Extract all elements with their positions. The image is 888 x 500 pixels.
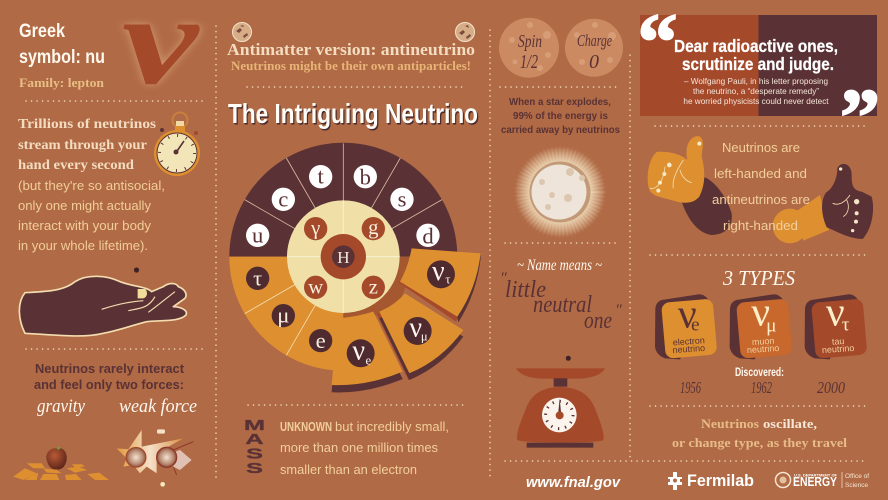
quote text: scrutinize and judge. — [682, 54, 834, 74]
quark tokens: s — [398, 187, 406, 212]
icon: left-hand thumbs up — [648, 136, 732, 235]
heading: Greek symbol: Greek — [19, 20, 65, 42]
quark tokens: b — [360, 165, 371, 190]
neutrino wedge: electron: e — [366, 354, 372, 368]
card: tau neutrino: ν — [826, 289, 845, 335]
panel: antimatter — [227, 22, 475, 73]
heading: antimatter version: Antimatter version: antineutrino — [227, 40, 475, 59]
lepton half ring — [229, 257, 343, 371]
panel: oscillation: or change type, as they travel — [672, 435, 847, 450]
boson tokens: z — [369, 276, 378, 298]
panel: symbol and family — [19, 0, 200, 111]
heading: Greek symbol — [19, 20, 105, 68]
years discovered: 1956 — [680, 378, 701, 397]
panel: oscillation: Neutrinos — [701, 416, 759, 431]
quote text — [674, 36, 838, 74]
panel: spin: 1/2 — [520, 51, 538, 73]
text: handedness — [712, 141, 810, 233]
card: muon neutrino: muon — [752, 336, 775, 347]
boson tokens: γ — [310, 218, 320, 240]
text: antisocial note: interact with your body — [18, 219, 152, 233]
panel: Pauli quote — [638, 0, 880, 162]
text: star explodes: 99% of the energy is — [513, 111, 608, 122]
link: website: www.fnal.gov — [526, 474, 622, 491]
card: muon neutrino — [730, 289, 792, 359]
icon: neutrino dot above hand — [134, 267, 139, 273]
lepton tokens: τ — [253, 266, 262, 291]
text: family: Family: lepton — [19, 75, 105, 90]
icon: apple on warped grid — [13, 447, 109, 480]
lepton tokens: e — [316, 328, 326, 353]
heading: name means: ~ Name means ~ — [517, 257, 602, 274]
text: mass description — [280, 419, 449, 477]
icon: right-hand thumbs up — [773, 164, 873, 243]
card: electron neutrino — [655, 291, 717, 359]
boson disc: H — [337, 248, 350, 267]
card: electron neutrino: ν — [678, 291, 697, 337]
text: handedness: antineutrinos are — [712, 193, 810, 207]
heading: 3 types: 3 TYPES — [722, 266, 795, 290]
neutrino wedge: tau: τ — [445, 272, 451, 286]
text: rarely interact — [34, 361, 185, 392]
years discovered — [680, 378, 845, 397]
text: trillions statement — [18, 116, 156, 172]
logo: Department of Energy — [776, 472, 869, 489]
quote text: Dear radioactive ones, — [674, 36, 838, 56]
text: antisocial note — [18, 179, 165, 253]
card: muon neutrino: ν — [751, 289, 770, 335]
icon: particle collision — [117, 429, 193, 487]
text: mass description: smaller than an electron — [280, 462, 417, 477]
text: little neutral one — [500, 270, 622, 334]
quote attribution: he worried physicists could never detect — [683, 97, 829, 106]
neutrino wedge: electron — [332, 312, 403, 392]
icon: closing quote mark: ” — [840, 74, 880, 162]
neutrino wedge: muon — [377, 293, 463, 380]
quark tokens: t — [318, 164, 325, 189]
lepton tokens — [246, 266, 332, 353]
text: handedness: left-handed and — [714, 167, 807, 181]
quote attribution — [683, 77, 829, 106]
card: muon neutrino: neutrino — [747, 343, 780, 355]
panel: oscillation: oscillate, — [763, 416, 817, 431]
logo: Department of Energy: U.S. DEPARTMENT OF — [794, 474, 838, 478]
card: tau neutrino: neutrino — [822, 343, 855, 355]
label: MASS stacked: A — [245, 431, 264, 448]
panel: name means — [500, 257, 622, 448]
neutrino wedge: muon: ν — [409, 313, 422, 344]
quark tokens: d — [422, 223, 434, 248]
heading: Greek symbol: symbol: nu — [19, 46, 105, 68]
text: handedness: right-handed — [723, 219, 798, 233]
panel: oscillation — [672, 416, 847, 450]
label: MASS stacked: S — [246, 460, 263, 477]
text: little neutral one: little — [505, 277, 546, 303]
icon: opening quote mark: “ — [638, 0, 678, 87]
text: mass description: but incredibly small, — [335, 419, 449, 434]
text: trillions statement: hand every second — [18, 157, 135, 172]
neutrino wedge: tau: ν — [432, 256, 445, 287]
card: muon neutrino: μ — [766, 315, 777, 336]
icon: open hand — [19, 276, 186, 336]
logo: Department of Energy: Office of — [845, 473, 869, 480]
icon: stopwatch — [154, 112, 200, 176]
label: discovered: Discovered: — [735, 365, 784, 379]
quote attribution: – Wolfgang Pauli, in his letter proposing — [684, 77, 829, 86]
label: MASS stacked — [244, 417, 265, 477]
card: electron neutrino: neutrino — [672, 343, 705, 355]
text: star explodes — [501, 97, 620, 136]
panel: two forces — [13, 361, 197, 487]
text: rarely interact: Neutrinos rarely interact — [35, 361, 185, 376]
icon: right antimatter particle — [456, 22, 474, 42]
label: gravity: gravity — [37, 396, 85, 417]
text: little neutral one: one — [584, 308, 612, 334]
years discovered: 1962 — [751, 378, 772, 397]
gap shadow behind pulled wedges — [343, 257, 412, 322]
years discovered: 2000 — [817, 378, 845, 397]
text: trillions statement: stream through your — [18, 137, 147, 152]
text: own antiparticles: Neutrinos might be their own antiparticles! — [231, 59, 471, 73]
text: little neutral one: " — [615, 302, 622, 319]
neutrino wedge: electron: ν — [352, 335, 365, 366]
panel: charge — [565, 19, 623, 77]
quote attribution: the neutrino, a “desperate remedy” — [693, 87, 819, 96]
title: The Intriguing Neutrino — [228, 98, 478, 129]
title: The Intriguing Neutrino — [229, 100, 479, 130]
boson tokens: w — [308, 276, 323, 298]
label: MASS stacked: S — [246, 446, 263, 462]
text: antisocial note: in your whole lifetime). — [18, 239, 148, 253]
card: electron neutrino: electron — [672, 335, 705, 347]
text: star explodes: When a star explodes, — [509, 97, 611, 108]
text: antisocial note: only one might actually — [18, 199, 152, 213]
text: handedness: Neutrinos are — [722, 141, 800, 155]
logo: Department of Energy: ENERGY — [793, 474, 837, 489]
text: mass description: more than one million times — [280, 440, 438, 455]
panel: mass — [244, 417, 449, 477]
lepton tokens: μ — [277, 302, 289, 327]
text: little neutral one: " — [500, 270, 507, 287]
quark tokens — [246, 164, 440, 248]
text: mass description: UNKNOWN — [280, 419, 332, 434]
chart: particle wheel — [229, 143, 481, 392]
panel: spin — [499, 18, 559, 78]
neutrino wedge: tau — [399, 248, 481, 322]
panel: three types — [655, 266, 867, 397]
footer — [526, 471, 869, 491]
boson tokens — [304, 217, 385, 299]
icon: kitchen scale — [516, 368, 605, 448]
card: tau neutrino: tau — [832, 336, 845, 347]
panel: charge: Charge — [577, 31, 612, 50]
logo: Department of Energy: Science — [845, 482, 869, 489]
card: electron neutrino: e — [691, 315, 700, 336]
text: trillions statement: Trillions of neutrinos — [18, 116, 156, 131]
label: weak force: weak force — [119, 396, 197, 417]
logo: Fermilab: Fermilab — [687, 471, 754, 490]
text: antisocial note: (but they're so antisocial, — [18, 179, 165, 193]
icon: neutrino dot above scale — [566, 356, 571, 361]
panel: charge: 0 — [589, 51, 599, 73]
boson tokens: g — [368, 217, 378, 239]
label: MASS stacked: M — [244, 417, 265, 434]
panel: handedness — [648, 136, 873, 243]
card: tau neutrino: τ — [842, 315, 850, 336]
icon: exploding star — [515, 147, 605, 237]
quark tokens: c — [278, 187, 288, 212]
panel: supernova — [501, 97, 620, 237]
card: tau neutrino — [805, 289, 867, 359]
text: rarely interact: and feel only two forces: — [34, 377, 184, 392]
panel: trillions of neutrinos — [18, 112, 200, 336]
icon: left antimatter particle — [232, 22, 252, 42]
neutrino wedge: muon: μ — [421, 330, 428, 344]
panel: spin: Spin — [518, 31, 542, 51]
quote background — [640, 15, 877, 116]
boson disc — [287, 200, 400, 313]
quark tokens: u — [252, 223, 263, 248]
quark half ring — [229, 143, 457, 257]
text: little neutral one: neutral — [533, 292, 592, 318]
text: star explodes: carried away by neutrinos — [501, 125, 620, 136]
